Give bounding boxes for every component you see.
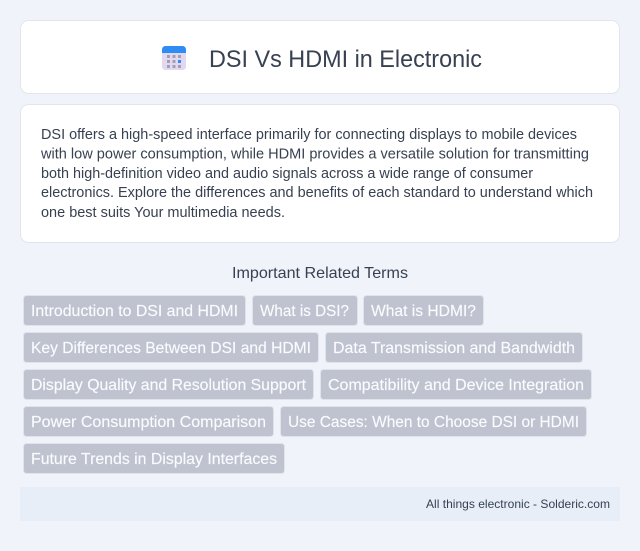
tag: Introduction to DSI and HDMI	[31, 303, 238, 320]
tag: Future Trends in Display Interfaces	[31, 451, 277, 468]
description text	[40, 127, 593, 221]
description text: one best suits Your multimedia needs.	[41, 205, 285, 221]
tag: Compatibility and Device Integration	[328, 377, 584, 394]
panel: related term tags	[24, 296, 592, 474]
description text: DSI offers a high-speed interface primarily for connecting displays to mobile devices	[41, 127, 577, 143]
footer	[20, 487, 620, 521]
icon: calendar grid	[162, 46, 186, 70]
title: DSI Vs HDMI in Electronic	[209, 46, 482, 73]
tag	[280, 406, 586, 436]
description text: both high-definition video and audio signals across a wide range of consumer	[41, 166, 533, 182]
tag	[24, 332, 318, 362]
tag	[364, 296, 484, 326]
footer: All things electronic - Solderic.com	[426, 497, 610, 511]
tag	[24, 296, 246, 326]
description text: with low power consumption, while HDMI provides a versatile solution for transmitting	[40, 146, 589, 162]
tag: What is HDMI?	[371, 303, 476, 320]
tag: What is DSI?	[260, 303, 349, 320]
tag: Power Consumption Comparison	[31, 414, 266, 431]
tag: Key Differences Between DSI and HDMI	[31, 340, 311, 357]
tag	[24, 406, 274, 436]
heading: important related terms: Important Related Terms	[232, 265, 408, 282]
tag: Display Quality and Resolution Support	[31, 377, 307, 394]
tag	[320, 370, 592, 400]
description text: electronics. Explore the differences and benefits of each standard to understand which	[41, 185, 593, 201]
tag	[326, 332, 582, 362]
panel: header	[20, 20, 620, 94]
tag: Use Cases: When to Choose DSI or HDMI	[288, 414, 579, 431]
tag	[24, 444, 284, 474]
tag: Data Transmission and Bandwidth	[333, 340, 575, 357]
tag	[24, 370, 314, 400]
tag	[252, 296, 358, 326]
panel: description	[20, 104, 620, 242]
